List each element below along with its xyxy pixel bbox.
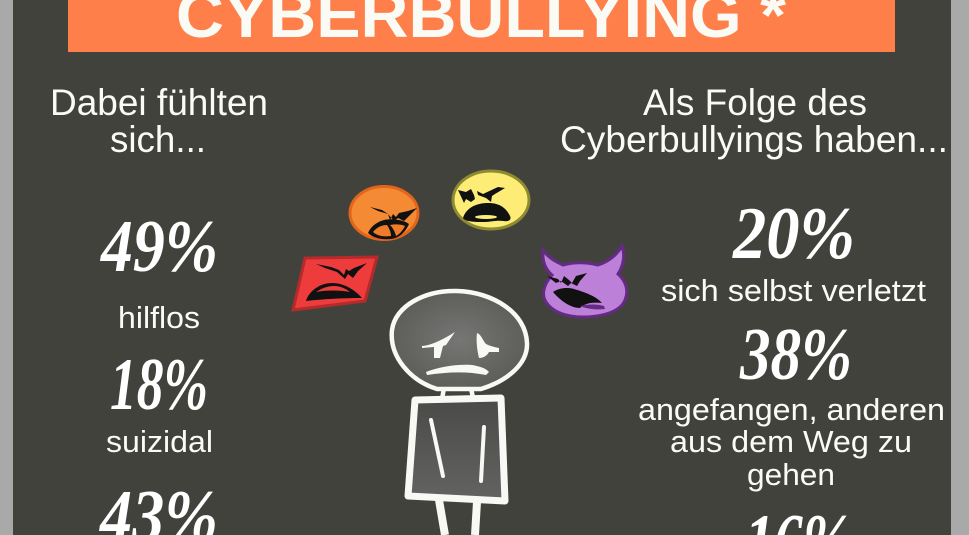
left heading: sich... <box>110 119 206 160</box>
right heading <box>560 82 948 160</box>
neck <box>442 388 473 399</box>
left heading <box>50 82 268 160</box>
stat: 18% suizidal: suizidal <box>106 424 213 459</box>
title banner <box>68 0 895 52</box>
left heading: Dabei fühlten <box>50 82 268 123</box>
arms <box>431 420 484 481</box>
stat: 18% suizidal <box>106 344 213 459</box>
stat: 38% angefangen, anderen aus dem Weg zu gehen: angefangen, anderen <box>638 392 945 427</box>
icon: orange angry face <box>350 186 418 240</box>
icon: red angry square <box>293 257 377 310</box>
face <box>422 332 499 375</box>
stat: 20% sich selbst verletzt: 20% <box>732 193 855 275</box>
torso <box>408 398 505 501</box>
stat: 38% angefangen, anderen aus dem Weg zu gehen: aus dem Weg zu <box>670 424 912 459</box>
stat: 18% suizidal: 18% <box>110 344 208 426</box>
stat: 49% hilflos <box>99 206 218 335</box>
stat: 38% angefangen, anderen aus dem Weg zu gehen <box>638 314 945 492</box>
stat: 20% sich selbst verletzt: sich selbst verletzt <box>661 273 926 308</box>
figure: sad stick person <box>392 291 527 535</box>
stat: 49% hilflos: 49% <box>99 206 218 288</box>
icon: yellow angry face <box>453 171 529 229</box>
right heading: Als Folge des <box>643 82 867 123</box>
right heading: Cyberbullyings haben... <box>560 119 948 160</box>
stat: 38% angefangen, anderen aus dem Weg zu gehen: 38% <box>739 314 852 396</box>
head <box>392 291 527 389</box>
stat: 49% hilflos: hilflos <box>118 300 200 335</box>
stat: 20% sich selbst verletzt <box>661 193 926 308</box>
legs <box>439 500 477 535</box>
stat: 38% angefangen, anderen aus dem Weg zu gehen: gehen <box>747 457 835 492</box>
icon: purple devil face <box>543 246 627 317</box>
